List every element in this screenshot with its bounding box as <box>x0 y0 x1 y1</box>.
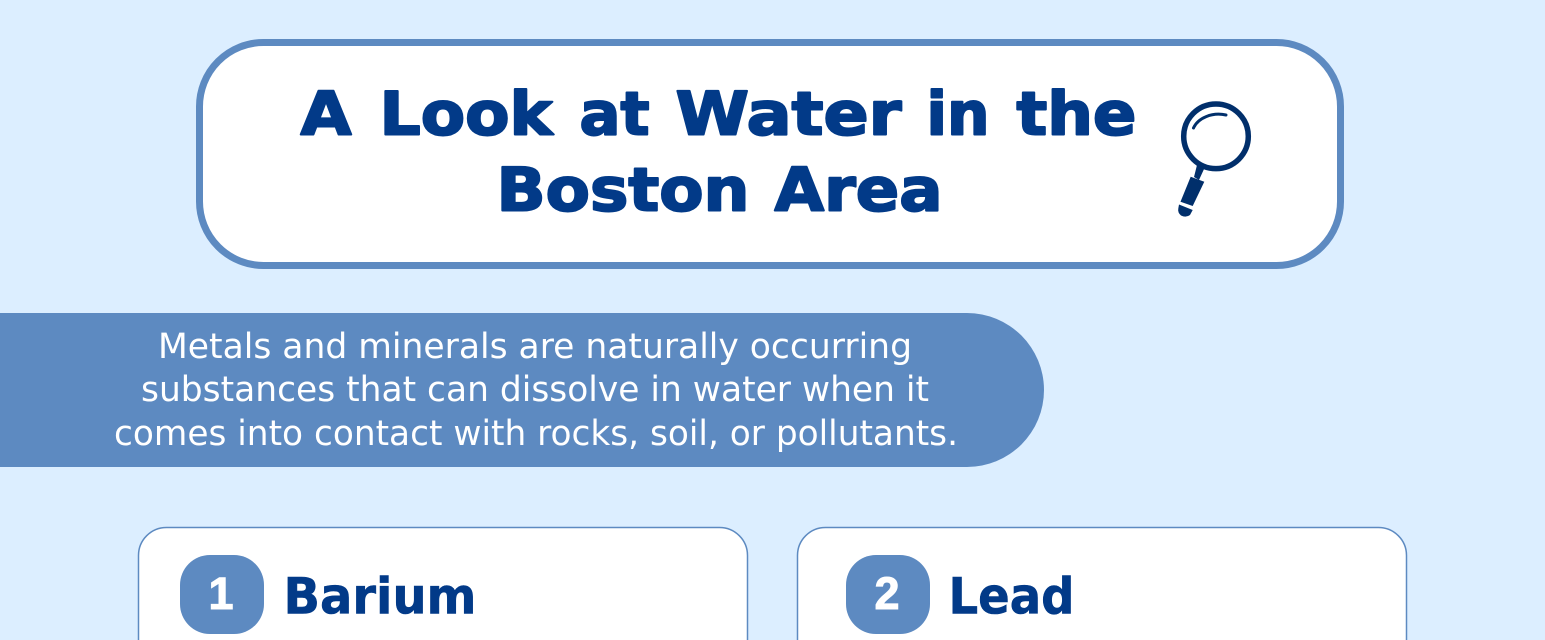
heading: lead: Lead <box>948 568 1074 626</box>
title panel <box>200 42 1340 266</box>
intro text <box>114 327 958 454</box>
intro banner <box>0 313 1044 467</box>
panel: lead <box>798 528 1406 640</box>
title: at <box>580 80 650 150</box>
intro text: comes into contact with rocks, soil, or pollutants. <box>114 414 958 454</box>
title: the <box>1016 80 1136 150</box>
title <box>300 80 1136 226</box>
badge: 2 <box>846 555 930 634</box>
intro text: substances that can dissolve in water when it <box>141 370 929 410</box>
icon: magnifying glass <box>1178 104 1248 217</box>
intro text: Metals and minerals are naturally occurring <box>158 327 912 367</box>
badge: 1: 1 <box>208 568 234 619</box>
heading: barium: Barium <box>284 568 476 626</box>
badge: 1 <box>180 555 264 634</box>
title: Look <box>380 80 555 150</box>
title: Water <box>676 80 902 150</box>
title: Area <box>774 156 942 226</box>
title: Boston <box>496 156 750 226</box>
panel: barium <box>138 528 748 640</box>
title: in <box>926 80 990 150</box>
title: A <box>300 80 352 150</box>
badge: 2: 2 <box>874 568 900 619</box>
